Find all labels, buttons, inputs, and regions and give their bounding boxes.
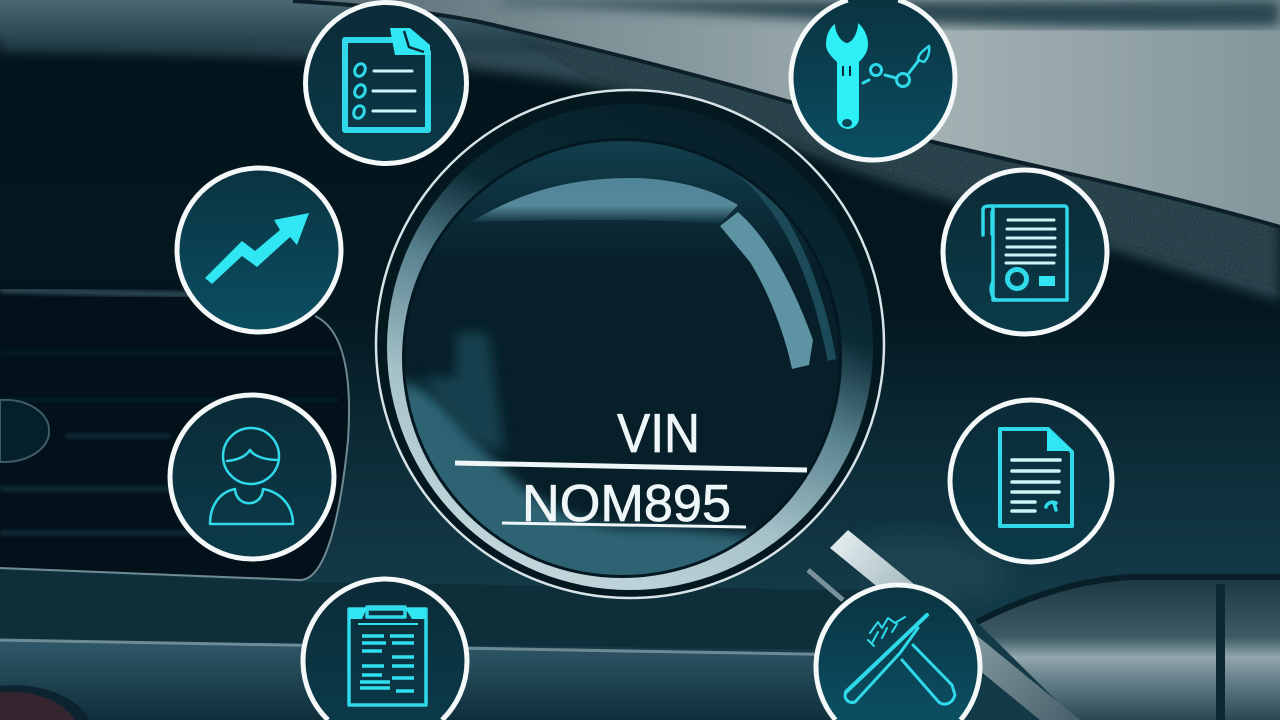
lens bright ring xyxy=(387,104,873,590)
icon: checklist document xyxy=(306,2,466,164)
background: right side lower glow xyxy=(860,535,1007,620)
VIN underline xyxy=(455,463,807,470)
background: dark top trim xyxy=(500,0,1280,28)
lens outer rim xyxy=(376,90,884,598)
icon: wrench and network nodes xyxy=(791,0,955,160)
magnifying glass xyxy=(376,90,884,600)
background: top left band xyxy=(0,0,600,62)
lens glass xyxy=(405,141,839,575)
glass reflections xyxy=(406,172,836,575)
icon: rising trend arrow xyxy=(177,168,341,332)
VIN label: VIN xyxy=(617,402,700,464)
icon: crossed tools xyxy=(816,585,980,720)
background: air vent xyxy=(0,287,349,580)
icon: document with seal xyxy=(950,400,1112,562)
background: dash band grain xyxy=(480,22,1280,290)
VIN number: NOM895 xyxy=(522,475,731,533)
background: textured dash band xyxy=(0,0,1280,300)
magnifier handle xyxy=(808,530,1080,720)
icon: certificate scroll xyxy=(943,170,1107,334)
icon: person xyxy=(170,395,334,559)
background: lower left trim xyxy=(0,570,860,720)
lens inner dark line xyxy=(402,138,842,578)
number underline xyxy=(502,523,746,527)
icon: clipboard form xyxy=(303,579,467,720)
background: lower right panel xyxy=(977,577,1280,720)
background: light upper-right panel xyxy=(293,0,1280,227)
background: shadow edge under panel xyxy=(293,1,1280,227)
